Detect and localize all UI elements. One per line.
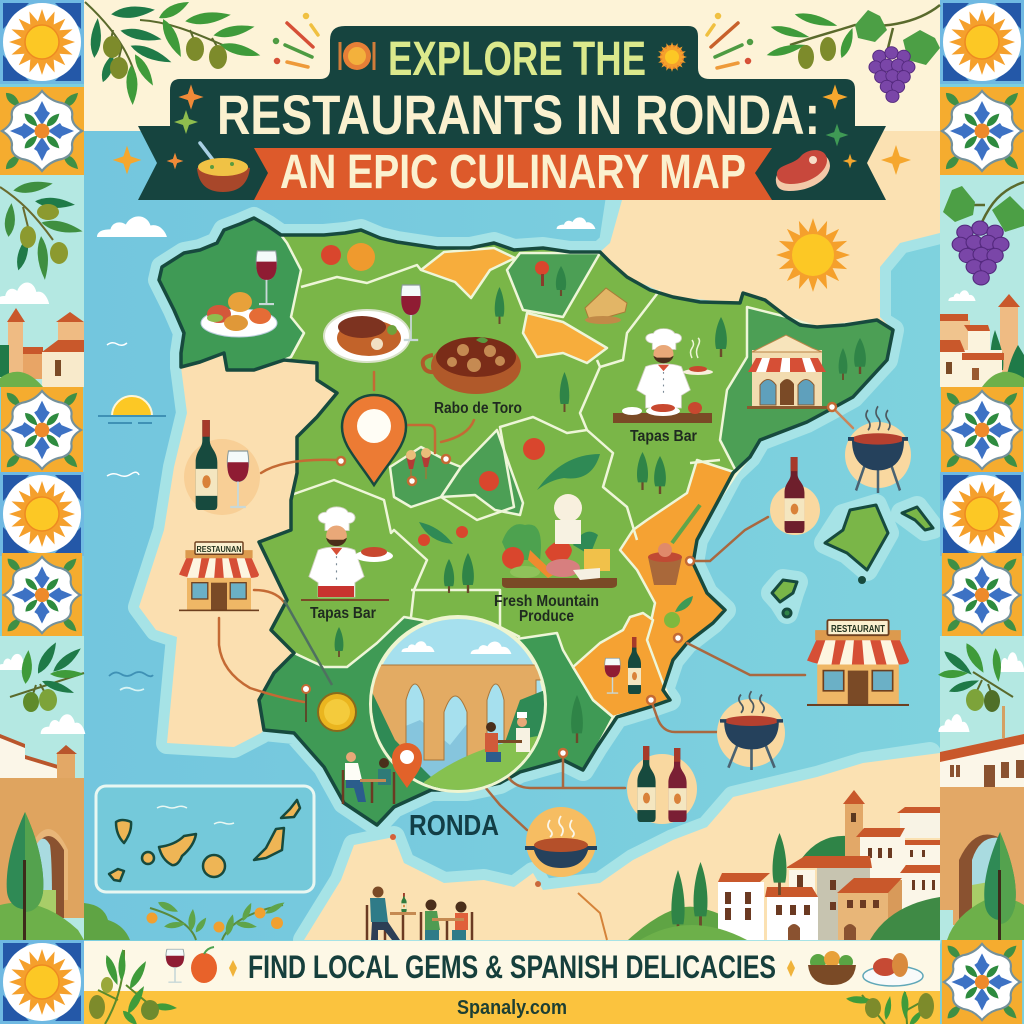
food: tapas platter	[201, 292, 277, 337]
icon: wine glass north	[401, 285, 421, 340]
trees on map	[335, 266, 866, 743]
region: Madrid	[441, 430, 523, 515]
title line 3: AN EPIC CULINARY MAP	[280, 146, 746, 199]
diners south of Ronda	[343, 752, 394, 804]
map of Spain	[159, 218, 893, 825]
restaurant north east	[747, 335, 827, 409]
decoration: confetti left	[274, 14, 318, 67]
diners in circle	[485, 712, 530, 762]
paella pot south	[525, 807, 597, 877]
plant pot east	[648, 505, 700, 628]
wine bottles south	[627, 746, 697, 824]
decoration: confetti right	[707, 14, 752, 68]
title line 2: RESTAURANTS IN RONDA:	[217, 83, 820, 146]
label: RONDA: RONDA	[409, 810, 499, 842]
icon: pizza plate	[340, 42, 374, 70]
icon: title sun	[657, 42, 687, 72]
pin at Ronda	[392, 743, 422, 788]
yellow footer	[84, 991, 940, 1024]
footer olive left	[89, 949, 177, 1024]
land: France, top right	[600, 131, 940, 330]
olive sprig on sand	[146, 899, 286, 940]
sun on land	[776, 218, 850, 292]
bottom banner	[84, 941, 940, 1024]
region: Asturias	[421, 248, 515, 298]
dark road line to coin	[284, 600, 332, 685]
road marker	[535, 881, 541, 887]
map pin large	[342, 395, 406, 485]
region: Murcia	[573, 613, 670, 717]
decoration: top-right olive and grape branch	[766, 5, 940, 102]
road	[578, 893, 607, 940]
food: stew pot	[423, 337, 521, 394]
website: Spanaly.com	[457, 997, 567, 1019]
icon: wine glass north-west	[256, 251, 277, 304]
food: cheese and bread	[585, 288, 627, 324]
wine bottle and glass, west	[184, 420, 260, 515]
footer bullet right	[787, 960, 795, 977]
footer slogan: FIND LOCAL GEMS & SPANISH DELICACIES	[248, 949, 776, 985]
bush bottom left	[84, 903, 130, 940]
restaurant west: RESTAUNAN	[196, 545, 242, 554]
region: Galicia	[159, 218, 304, 370]
icon: steak in banner	[776, 150, 830, 191]
region: Andalusia	[259, 617, 613, 825]
scene: olive branch and old walls, left	[0, 636, 85, 940]
footer salad bowl	[808, 951, 856, 985]
footer glass and tomato	[166, 947, 217, 983]
scene: grapes and village, right	[940, 175, 1024, 387]
waves blue	[109, 672, 153, 690]
tiles: right column	[938, 0, 1024, 1024]
chef small behind produce	[554, 494, 582, 544]
region: Catalonia	[720, 307, 893, 473]
label: Rabo de Toro: Rabo de Toro	[434, 400, 522, 417]
restaurant west	[179, 542, 259, 611]
scene: olive branch and arch, right	[938, 636, 1024, 940]
footer plate	[863, 953, 923, 986]
icon: paella bowl in banner	[197, 143, 250, 192]
connector rings	[337, 403, 836, 779]
tapas bar table	[613, 338, 713, 423]
tiles: left column	[0, 0, 85, 1024]
food: oxtail plate	[324, 310, 410, 362]
connector lines	[219, 372, 853, 830]
chef plate west	[301, 547, 393, 601]
food: market produce board	[502, 524, 617, 588]
gold coin	[302, 685, 356, 731]
label: Produce: Produce	[519, 608, 574, 625]
tomatoes and vegetables	[321, 243, 600, 546]
wine and glass south east	[605, 637, 641, 694]
ribbon	[254, 148, 772, 200]
decoration: top-left olive branch	[85, 0, 262, 105]
cluster: wine glasses near pin	[406, 448, 431, 479]
title line 1: EXPLORE THE	[388, 33, 646, 86]
region: Cantabria	[507, 253, 600, 317]
inset: Canary Islands	[96, 786, 314, 892]
outline of Spain	[159, 218, 893, 825]
bbq south east	[717, 691, 785, 770]
sunset on sea	[98, 396, 166, 423]
title banner	[138, 26, 886, 200]
Balearic islands	[772, 505, 933, 617]
chef north east	[637, 329, 690, 408]
sea background	[84, 130, 940, 940]
sparkles	[113, 84, 911, 175]
region: Rioja	[523, 313, 607, 363]
region: Valencia	[620, 460, 737, 690]
label: Tapas Bar north east: Tapas Bar	[630, 428, 697, 445]
coastal halo	[139, 131, 940, 940]
land: Portugal	[139, 353, 337, 747]
clouds over sea	[97, 216, 595, 237]
region: Extremadura patch	[390, 447, 461, 507]
wine bottle east	[770, 457, 820, 535]
chef west	[309, 507, 364, 597]
Andalusian village	[628, 790, 940, 940]
bbq north east	[845, 406, 911, 493]
label: Tapas Bar west: Tapas Bar	[310, 605, 376, 622]
land: North Africa	[304, 753, 940, 940]
label: Fresh Mountain: Fresh Mountain	[494, 593, 599, 610]
restaurant east	[807, 620, 909, 706]
diners at bottom	[367, 886, 472, 940]
scene: olive branch and village, left	[0, 175, 84, 387]
restaurant east: RESTAURANT	[831, 624, 885, 635]
footer bullet left	[229, 960, 237, 977]
waves	[107, 343, 237, 824]
Ronda aqueduct circle	[371, 617, 545, 800]
coast marker	[390, 834, 396, 840]
top cream band	[84, 0, 940, 131]
footer olive right	[846, 991, 934, 1024]
